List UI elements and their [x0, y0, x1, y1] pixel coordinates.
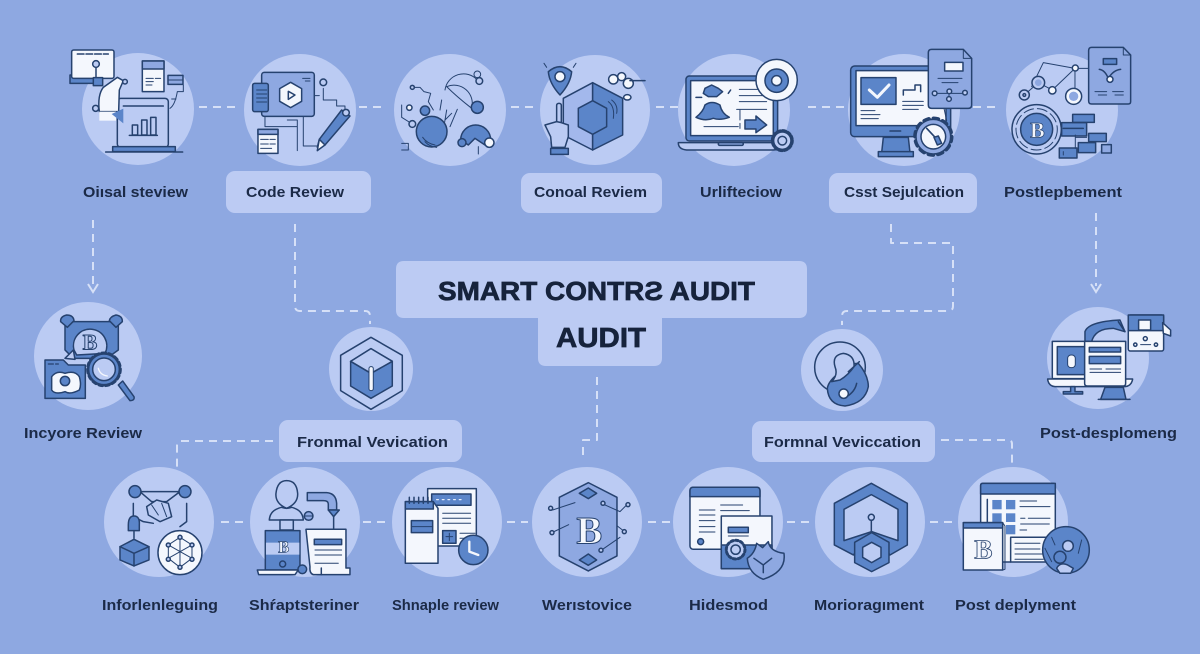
connector: cost simulation to right hexagon	[842, 224, 953, 325]
label: Csst Sejulcation	[844, 184, 964, 201]
icon: window, gear and shield	[690, 487, 784, 579]
icon: code panel and pencil	[253, 72, 350, 153]
node: unit workflow	[678, 54, 797, 201]
label: Incyore Review	[24, 425, 142, 442]
connector: code review to left hexagon	[295, 224, 370, 324]
icon: person, tap and document	[257, 481, 350, 575]
icon: bitcoin hexagon	[549, 483, 630, 571]
label: formal verification left: Fronmal Vevication	[297, 434, 448, 451]
icon: abstract figure	[815, 342, 868, 406]
label: Urlifteciow	[700, 184, 782, 201]
icon: monitor, laptop and printer	[1048, 315, 1171, 399]
node: smart contract writer	[249, 467, 360, 614]
connector: left verification to bottom left	[177, 441, 273, 467]
icon: connected spheres	[402, 71, 494, 154]
title banner	[396, 261, 807, 366]
node: monitoring management	[814, 467, 925, 614]
arrow: post-deployment to lower right	[1091, 213, 1101, 292]
arrow: initial review to inventory review	[88, 220, 98, 292]
icon: robot arm and laptop	[70, 50, 183, 152]
pill: code review	[226, 171, 371, 213]
label: Oiısal steview	[83, 184, 188, 201]
icon: bitcoin, folder and magnifier: B	[83, 329, 98, 354]
label: Morioragıment	[814, 597, 924, 614]
title banner: SMART CONTRƧ AUDIT	[438, 276, 755, 306]
node: information gathering	[102, 467, 218, 614]
pill: formal verification right	[752, 421, 935, 462]
icon: nested hexagons	[834, 483, 907, 572]
icon: cube in hexagon	[341, 337, 402, 409]
node: initial review	[70, 50, 194, 201]
node: post-deployment right	[1040, 307, 1177, 442]
label: Hidesmod	[689, 597, 768, 614]
node: sample review	[392, 467, 502, 614]
node: left hexagon	[329, 327, 413, 411]
node: code review	[226, 54, 371, 213]
node: conceptual review	[521, 55, 662, 213]
icon: drone, cube and network	[120, 486, 202, 575]
label: Conoal Reviem	[534, 184, 647, 201]
label: formal verification right: Formnal Veviccation	[764, 434, 921, 451]
icon: nodes, document and bitcoin coin: B	[1030, 117, 1045, 142]
connector: right verification to bottom right	[941, 440, 1012, 463]
label: Werıstovice	[542, 597, 632, 614]
label: Shnaple review	[392, 597, 499, 614]
pill: cost simulation	[829, 173, 977, 213]
node: right figure	[801, 329, 883, 411]
node: hidden mode	[673, 467, 784, 614]
pill: conceptual review	[521, 173, 662, 213]
icon: hexagon, pin and hand	[544, 63, 645, 154]
icon: monitor, document and gear	[851, 49, 972, 157]
icon: bitcoin hexagon: B	[576, 510, 602, 552]
title banner: AUDIT	[556, 322, 646, 353]
icon: dashboard, bitcoin book and users: B	[974, 534, 992, 564]
node: post deployment	[955, 467, 1089, 614]
node: web service	[532, 467, 642, 614]
connector: title to bottom centre	[583, 377, 597, 461]
node: network analysis	[394, 54, 506, 166]
label: Shŕaptsteriner	[249, 597, 359, 614]
label: Post-desplomeng	[1040, 425, 1177, 442]
icon: laptop with target and gear	[678, 59, 797, 151]
icon: person, tap and document: B	[278, 538, 289, 557]
label: Inforlenleguing	[102, 597, 218, 614]
pill: formal verification left	[279, 420, 462, 462]
label: Post deplyment	[955, 597, 1076, 614]
label: Code Review	[246, 184, 344, 201]
node: post-deployment top	[1004, 47, 1131, 201]
node: cost simulation	[829, 49, 977, 213]
label: Postlepbement	[1004, 184, 1122, 201]
icon: dashboard, bitcoin book and users	[963, 483, 1089, 573]
icon: nodes, document and bitcoin coin	[1012, 47, 1131, 158]
icon: notebook, report and clock	[405, 489, 488, 565]
node: inventory review	[24, 302, 142, 442]
